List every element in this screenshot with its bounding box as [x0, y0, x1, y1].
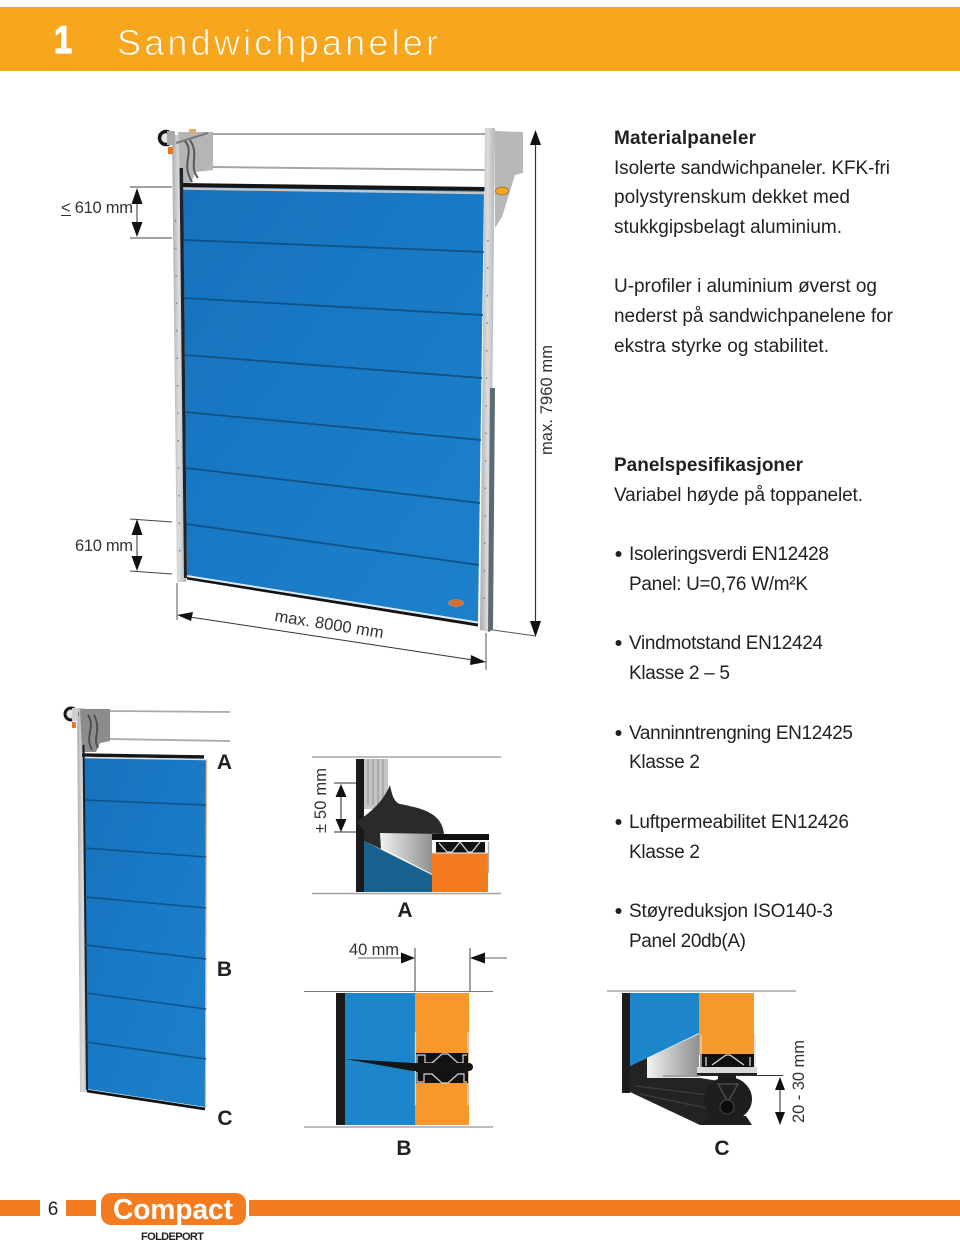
dimension: 610 mm panel height: [75, 519, 172, 574]
chapter number: 1: [54, 19, 72, 62]
grey cables behind: [363, 759, 388, 809]
label: 20 - 30 mm: 20 - 30 mm: [790, 1040, 808, 1123]
block: Materialpaneler: [614, 128, 890, 238]
footer bars: [0, 1200, 960, 1216]
spec: air: Luftpermeabilitet EN12426: [629, 812, 849, 833]
block: Panelspesifikasjoner: Panelspesifikasjoner: [614, 455, 804, 476]
motor bracket: [80, 709, 110, 752]
logo: [101, 1193, 246, 1243]
top edge: [82, 755, 206, 760]
yellow badge: [496, 187, 508, 195]
text column: [614, 128, 894, 952]
left black seal: [180, 168, 187, 578]
label: max. 7960 mm: max. 7960 mm: [538, 345, 556, 455]
label: plus minus 50 mm: ± 50 mm: [312, 768, 330, 833]
small door illustration: [65, 708, 230, 1109]
silver profile: [647, 1034, 699, 1078]
main door illustration: [160, 128, 523, 632]
lower profile: [416, 1071, 468, 1083]
dimension: 20-30 mm: [735, 1040, 808, 1125]
label: max. 8000 mm: max. 8000 mm: [273, 607, 385, 642]
panel seams: [184, 240, 484, 565]
spec: insulation: Isoleringsverdi EN12428: [629, 544, 829, 565]
orange core: [415, 993, 469, 1125]
spec: wind: Klasse 2 – 5: [629, 663, 730, 684]
dimension: 40 mm: [349, 941, 507, 991]
block: U-profiler: nederst på sandwichpanelene for: [614, 306, 894, 327]
spec: air: Klasse 2: [629, 842, 700, 863]
orange handle badge: [448, 600, 464, 606]
top edge: [181, 185, 485, 193]
logo: Compact: [113, 1194, 233, 1226]
block: Materialpaneler: Materialpaneler: [614, 128, 757, 149]
profile sides: [416, 1032, 468, 1105]
letter B under detail: B: [396, 1137, 412, 1160]
callout letter C: C: [217, 1107, 233, 1130]
bottom edge: [187, 576, 478, 625]
dimension: width 8000: [177, 583, 486, 670]
right bracket: [495, 131, 523, 228]
detail C: [607, 991, 796, 1125]
seal bulb: [704, 1074, 752, 1125]
dimension: plus minus 50 mm: [312, 768, 356, 833]
blue panel: [630, 993, 699, 1066]
spec: noise: Panel 20db(A): [629, 931, 746, 952]
black post: [356, 759, 364, 892]
silver profile: [380, 833, 432, 874]
upper profile: [416, 1053, 468, 1065]
wheel: [160, 129, 196, 154]
title: Sandwichpaneler: [117, 22, 438, 63]
block: U-profiler: U-profiler i aluminium øverst og: [614, 276, 877, 297]
spec: wind: Vindmotstand EN12424: [629, 633, 823, 654]
right orange edge: [206, 759, 207, 1108]
footer: [0, 1193, 960, 1243]
spec: wind: [616, 633, 823, 684]
spec: noise: Støyreduksjon ISO140-3: [629, 901, 833, 922]
spec: insulation: Panel: U=0,76 W/m²K: [629, 574, 808, 595]
wheel: [65, 708, 78, 728]
letter C under detail: C: [714, 1137, 730, 1160]
black post: [336, 993, 345, 1125]
bottom edge: [87, 1091, 205, 1109]
blue panel: [345, 993, 415, 1125]
detail B: [304, 992, 493, 1127]
blue cut: [364, 841, 432, 892]
left post: [172, 135, 186, 582]
U-profile: [663, 1035, 757, 1076]
left post: [77, 708, 88, 1092]
door blue panel: [183, 186, 484, 622]
motor bracket and cables: [176, 132, 213, 184]
right post: [480, 128, 495, 632]
orange core: [699, 993, 754, 1055]
page number: 6: [48, 1199, 58, 1220]
door blue panel: [84, 757, 206, 1107]
black post: [622, 993, 630, 1093]
dark wedge: [630, 1058, 725, 1125]
post rivets: [176, 220, 488, 620]
spec: water: Klasse 2: [629, 752, 700, 773]
callout letter A: A: [217, 751, 232, 774]
spec: water: Vanninntrengning EN12425: [629, 723, 853, 744]
orange core: [432, 853, 488, 892]
U-profile: [432, 834, 489, 873]
callout letter B: B: [217, 958, 232, 981]
detail A: [312, 757, 501, 894]
block: U-profiler: [614, 276, 894, 357]
seams: [85, 800, 206, 1059]
left seal: [84, 745, 87, 1090]
logo: FOLDEPORT: [141, 1231, 204, 1243]
dimension: height 7960: [493, 130, 556, 637]
block: Materialpaneler: Isolerte sandwichpaneler. KFK-fri: [614, 158, 890, 179]
spec: noise: [616, 901, 833, 952]
spec: water: [616, 723, 853, 773]
spec: insulation: [616, 544, 829, 595]
right post dark side: [488, 388, 495, 632]
block: Panelspesifikasjoner: Variabel høyde på toppanelet.: [614, 485, 863, 506]
label: less or equal 610 mm: < 610 mm: [61, 199, 133, 217]
block: Materialpaneler: polystyrenskum dekket med: [614, 187, 850, 208]
seal fin: [345, 1059, 473, 1071]
header band: [0, 7, 960, 71]
block: Panelspesifikasjoner: [614, 455, 863, 506]
dimension: top panel height: [61, 187, 172, 238]
block: Materialpaneler: stukkgipsbelagt aluminium.: [614, 217, 842, 238]
block: U-profiler: ekstra styrke og stabilitet.: [614, 336, 829, 357]
black seal: [356, 785, 444, 849]
label: 610 mm: 610 mm: [75, 537, 133, 555]
top rails: [212, 134, 485, 170]
spec: air: [616, 812, 849, 863]
rails: [108, 711, 230, 741]
label: 40 mm: 40 mm: [349, 941, 399, 959]
letter A under detail: A: [397, 899, 413, 922]
